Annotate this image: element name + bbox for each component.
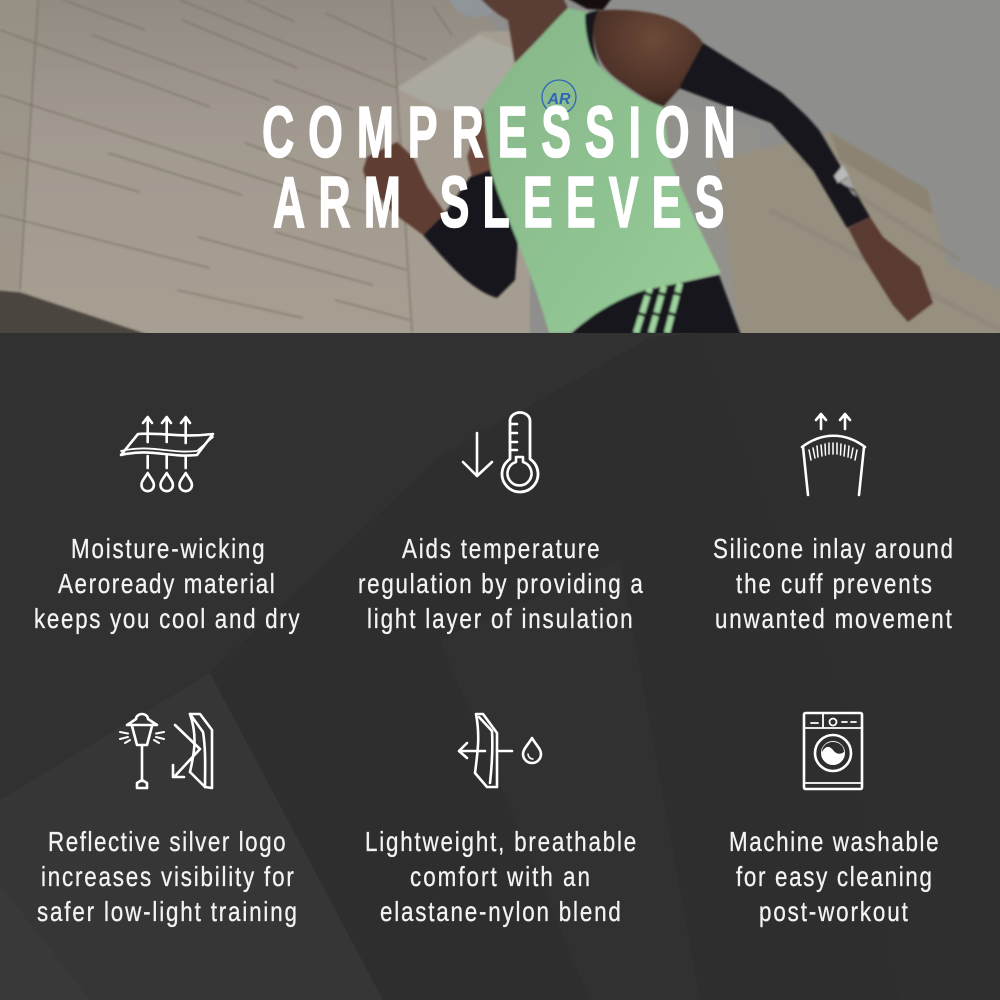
- icon: down arrow and thermometer: [463, 412, 538, 492]
- card: moisture-wicking: [34, 417, 300, 635]
- text: reflective logo: [37, 827, 297, 928]
- text: moisture-wicking: keeps you cool and dry: [34, 604, 300, 635]
- text: lightweight: [365, 827, 636, 928]
- shirt logo: AR: [546, 91, 571, 108]
- upper sleeve: [679, 43, 870, 228]
- shirt logo: [542, 80, 576, 114]
- left arm and hand: [467, 107, 492, 178]
- card: reflective logo: [37, 714, 297, 928]
- text: silicone cuff: Silicone inlay around: [713, 534, 953, 565]
- card: machine washable: [729, 713, 939, 928]
- forearm and hand right: [848, 217, 933, 322]
- shorts: [570, 275, 741, 335]
- icon: fabric with arrow and droplet: [459, 714, 541, 787]
- text: machine washable: [729, 827, 939, 928]
- text: temperature: [358, 534, 644, 635]
- card: temperature: [358, 412, 644, 635]
- text: reflective logo: Reflective silver logo: [48, 827, 286, 858]
- icon: washing machine: [804, 713, 862, 789]
- icon: cuff with silicone inlay: [802, 414, 865, 495]
- card: silicone cuff: [713, 414, 953, 635]
- text: lightweight: Lightweight, breathable: [365, 827, 636, 858]
- text: temperature: light layer of insulation: [367, 604, 633, 635]
- shirt strap: [585, 10, 600, 67]
- lower sleeve: [423, 170, 518, 298]
- shirt: [483, 8, 721, 333]
- hair: [567, 0, 612, 10]
- text: silicone cuff: [713, 534, 953, 635]
- text: moisture-wicking: Moisture-wicking: [71, 534, 265, 565]
- shoulder: [593, 10, 703, 107]
- runner: [363, 0, 933, 335]
- title: [262, 92, 736, 243]
- neck and chin: [480, 0, 568, 63]
- title: ARM SLEEVES: [273, 162, 724, 243]
- text: temperature: regulation by providing a: [358, 569, 644, 600]
- text: reflective logo: increases visibility for: [41, 862, 294, 893]
- text: machine washable: post-workout: [759, 897, 908, 928]
- text: lightweight: elastane-nylon blend: [380, 897, 621, 928]
- sleeve logo stripes: [834, 165, 849, 183]
- text: machine washable: for easy cleaning: [736, 862, 932, 893]
- text: silicone cuff: unwanted movement: [715, 604, 952, 635]
- title: COMPRESSION: [262, 92, 736, 173]
- text: moisture-wicking: Aeroready material: [58, 569, 275, 600]
- icon: moisture-wicking fabric: [121, 417, 213, 491]
- shorts stripes: [636, 283, 680, 333]
- text: reflective logo: safer low-light training: [37, 897, 297, 928]
- text: moisture-wicking: [34, 534, 300, 635]
- building wall right: [718, 132, 1000, 333]
- icon: street lamp and reflection arrow: [120, 714, 212, 788]
- building wall left: [0, 0, 530, 340]
- panel: hero photo of runner: [0, 0, 1000, 340]
- text: silicone cuff: the cuff prevents: [736, 569, 932, 600]
- panel: dark features background: [0, 333, 1000, 1000]
- text: temperature: Aids temperature: [402, 534, 600, 565]
- text: machine washable: Machine washable: [729, 827, 939, 858]
- card: lightweight: [365, 714, 636, 928]
- text: lightweight: comfort with an: [410, 862, 590, 893]
